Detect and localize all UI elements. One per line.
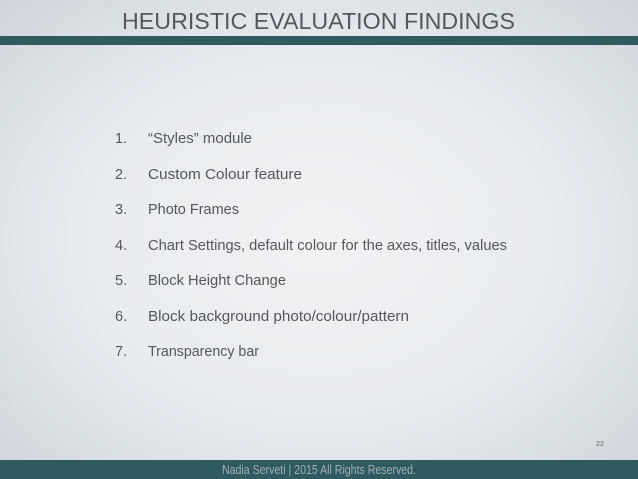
numbered findings list [115, 131, 507, 360]
item 7: Transparency bar [148, 344, 259, 360]
header bar [0, 36, 638, 45]
item 2: Custom Colour feature [148, 167, 302, 183]
footer bar [0, 460, 638, 479]
item 4: Chart Settings, default colour for the axes, titles, values [148, 238, 507, 254]
item 1: 1. [115, 131, 127, 147]
item 3: 3. [115, 202, 127, 218]
item 5: 5. [115, 273, 127, 289]
item 2: 2. [115, 167, 127, 183]
item 1: “Styles” module [148, 131, 252, 147]
item 6: 6. [115, 309, 127, 325]
item 7: 7. [115, 344, 127, 360]
item 3: Photo Frames [148, 202, 239, 218]
title: HEURISTIC EVALUATION FINDINGS [122, 8, 515, 34]
item 6: Block background photo/colour/pattern [148, 309, 409, 325]
footer credit: Nadia Serveti | 2015 All Rights Reserved. [222, 462, 416, 477]
page number: 22 [596, 441, 604, 448]
item 5: Block Height Change [148, 273, 286, 289]
item 4: 4. [115, 238, 127, 254]
